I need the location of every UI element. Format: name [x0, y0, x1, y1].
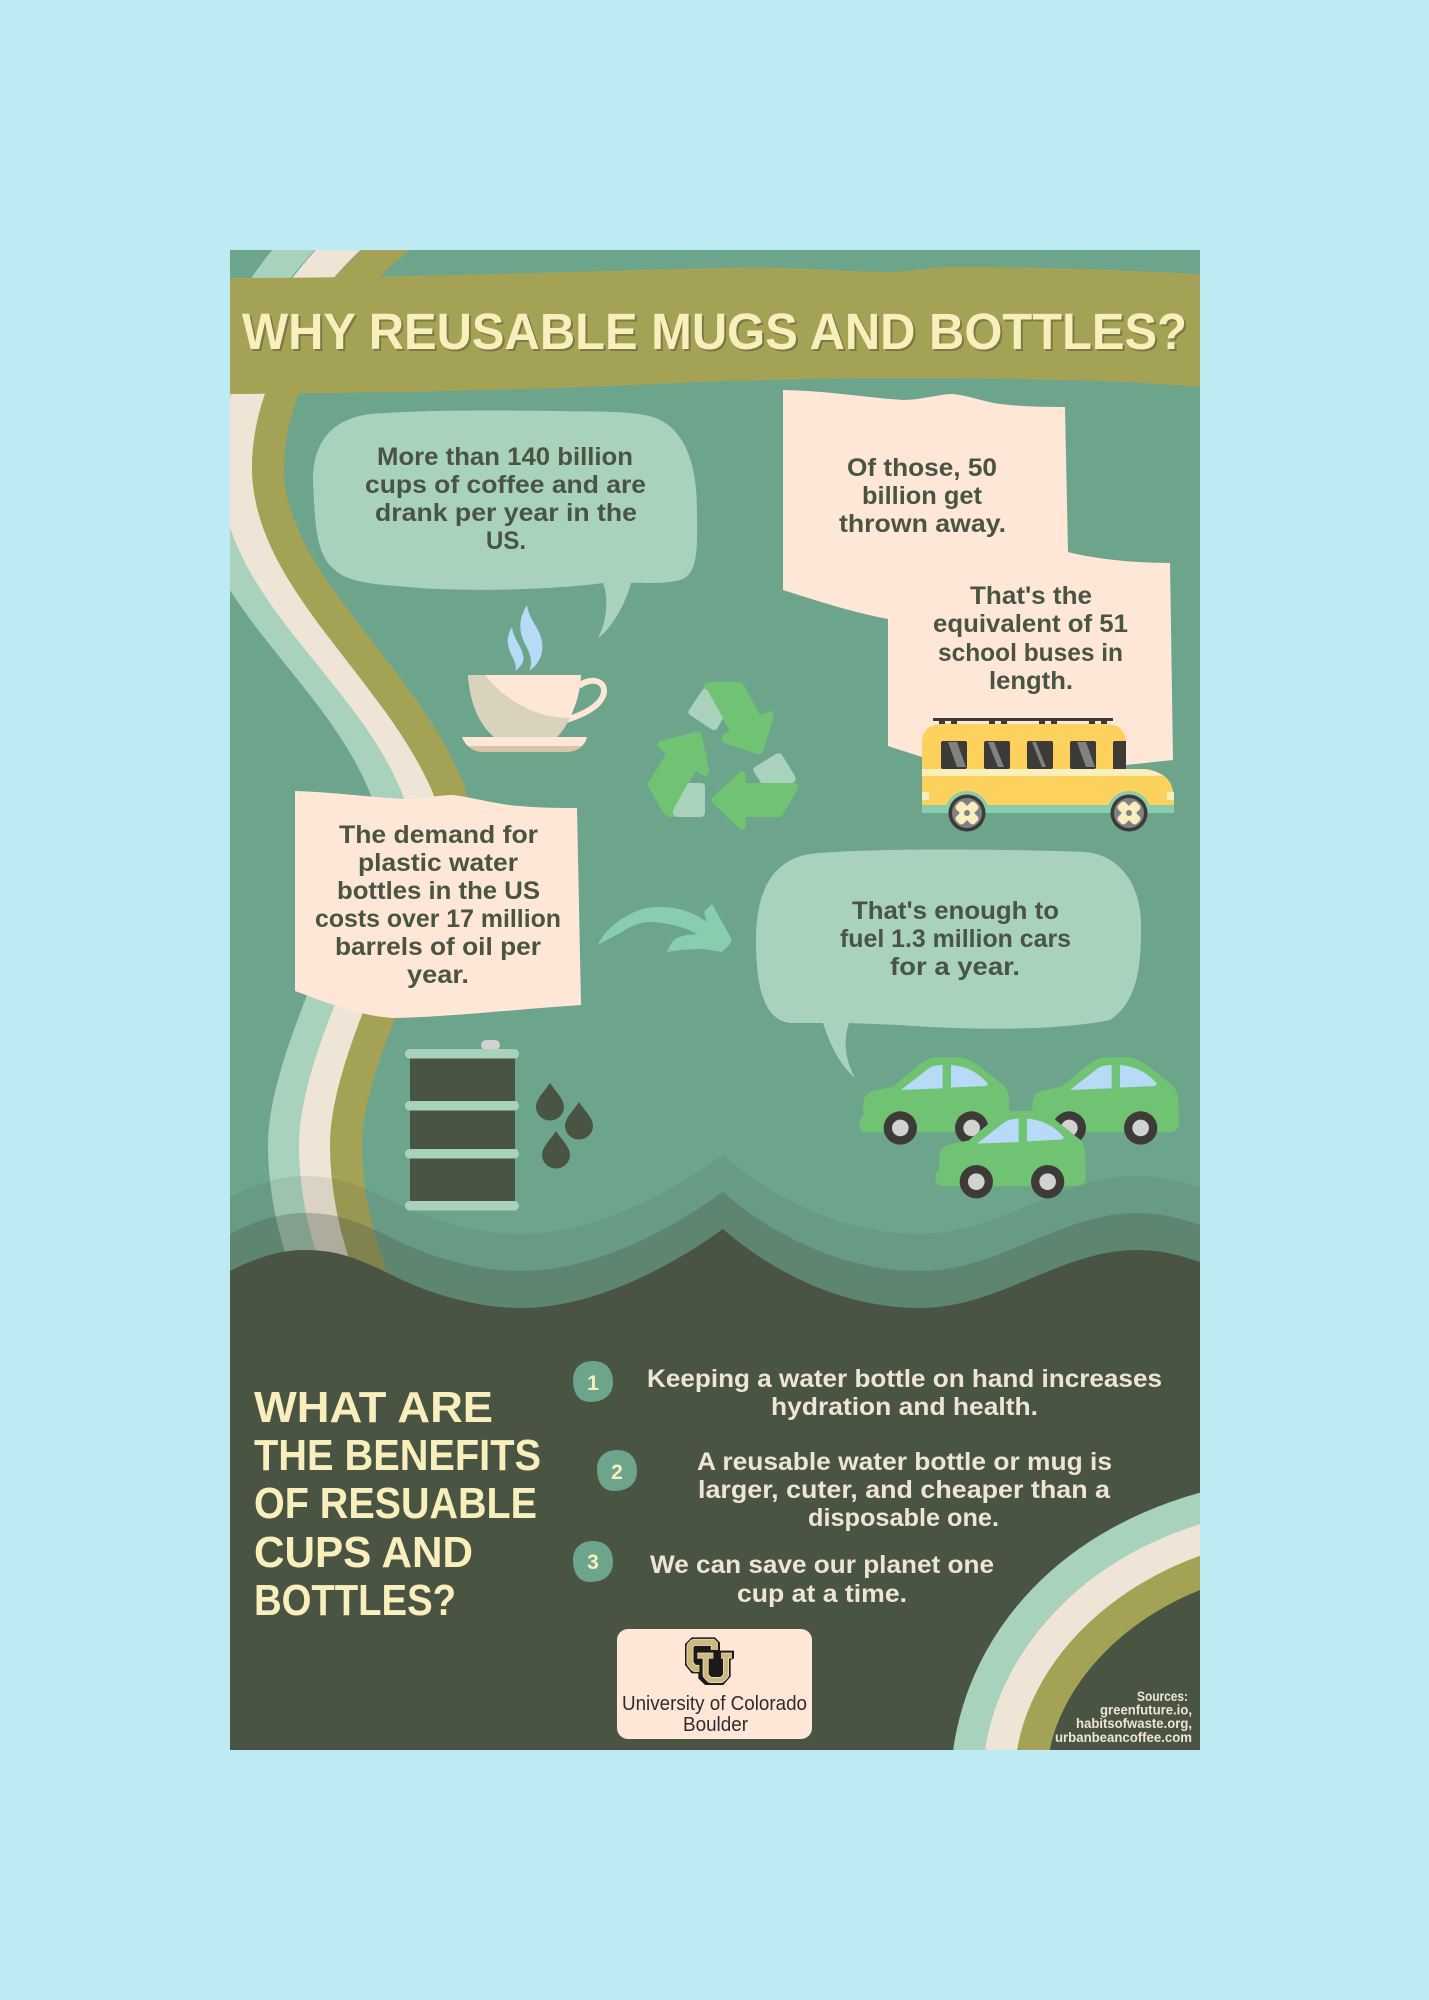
benefit 2: A reusable water bottle or mug is [697, 1448, 1112, 1476]
speech bubble: fuel cars: fuel 1.3 million cars [840, 925, 1071, 953]
paper note: plastic bottles demand: plastic water [358, 849, 518, 877]
paper note: school buses: equivalent of 51 [933, 610, 1128, 638]
dark lower panel [230, 1229, 1200, 1750]
benefit 1: hydration and health. [771, 1393, 1038, 1421]
paper note: school buses: length. [989, 667, 1073, 695]
wave layer top [230, 1156, 1200, 1271]
paper note: plastic bottles demand [295, 791, 581, 1018]
paper note: thrown away: billion get [862, 482, 983, 510]
bus wheels [948, 794, 1148, 832]
title: WHY REUSABLE MUGS AND BOTTLES? [242, 303, 1187, 360]
sources: greenfuture.io, [1100, 1702, 1192, 1718]
paper note: thrown away: Of those, 50 [847, 454, 997, 482]
speech bubble: 140 billion cups: US. [486, 527, 526, 555]
paper note: plastic bottles demand: barrels of oil per [335, 933, 541, 961]
icon: three green cars [859, 1057, 1179, 1198]
winding rainbow river [205, 218, 451, 1285]
paper note: thrown away: thrown away. [839, 510, 1006, 538]
speech bubble: fuel cars: That's enough to [852, 897, 1059, 925]
icon: school bus [922, 718, 1174, 832]
benefit 2: 2 [611, 1461, 623, 1484]
heading: benefits: THE BENEFITS [254, 1431, 541, 1480]
paper note: plastic bottles demand: year. [407, 961, 469, 989]
sources: Sources: [1137, 1689, 1188, 1704]
speech bubble: fuel cars [756, 850, 1141, 1078]
icon: oil barrel [405, 1040, 519, 1210]
benefit 1: 1 [587, 1372, 599, 1395]
poster panel [205, 218, 1220, 1752]
paper note: school buses: That's the [970, 582, 1092, 610]
car front [935, 1111, 1086, 1198]
benefit 2: larger, cuter, and cheaper than a [698, 1476, 1111, 1504]
speech bubble: fuel cars: for a year. [890, 953, 1020, 981]
benefit 3: We can save our planet one [650, 1551, 994, 1579]
benefit 3: 3 [587, 1551, 599, 1574]
sources: urbanbeancoffee.com [1055, 1730, 1192, 1745]
heading: benefits: CUPS AND [254, 1528, 473, 1577]
steam [508, 605, 542, 671]
heading: benefits [254, 1383, 541, 1625]
sources [1055, 1689, 1192, 1745]
benefit 3: cup at a time. [737, 1580, 907, 1608]
speech bubble: 140 billion cups: cups of coffee and are [365, 471, 646, 499]
paper note: plastic bottles demand: The demand for [339, 821, 538, 849]
icon: coffee cup [462, 605, 604, 752]
icon: oil drops [536, 1083, 593, 1168]
icon: recycling symbol [648, 682, 798, 830]
paper note: thrown away [783, 390, 1068, 640]
car right [1028, 1057, 1179, 1145]
benefit 1 [573, 1361, 1162, 1421]
title banner [229, 267, 1200, 394]
wave layer middle [230, 1192, 1200, 1308]
paper note: plastic bottles demand: bottles in the US [337, 877, 540, 905]
logo card [617, 1629, 812, 1739]
corner rainbow [969, 1504, 1220, 1752]
speech bubble: 140 billion cups: drank per year in the [375, 499, 637, 527]
speech bubble: 140 billion cups: More than 140 billion [377, 443, 633, 471]
benefit 2 [597, 1448, 1112, 1532]
paper note: school buses [888, 547, 1173, 768]
benefit 1: Keeping a water bottle on hand increases [647, 1365, 1162, 1393]
benefit 2: disposable one. [808, 1504, 999, 1532]
paper note: plastic bottles demand: costs over 17 million [315, 905, 561, 933]
heading: benefits: WHAT ARE [254, 1383, 493, 1432]
paper note: school buses: school buses in [938, 639, 1123, 667]
heading: benefits: OF RESUABLE [254, 1479, 537, 1528]
logo: CU monogram [685, 1637, 734, 1685]
arrow [598, 904, 731, 952]
benefit 3 [573, 1541, 994, 1608]
heading: benefits: BOTTLES? [254, 1576, 456, 1625]
car left [859, 1057, 1010, 1145]
logo card: Boulder [683, 1714, 748, 1736]
speech bubble: 140 billion cups [313, 410, 697, 638]
logo card: University of Colorado [622, 1693, 807, 1715]
sources: habitsofwaste.org, [1076, 1716, 1192, 1731]
